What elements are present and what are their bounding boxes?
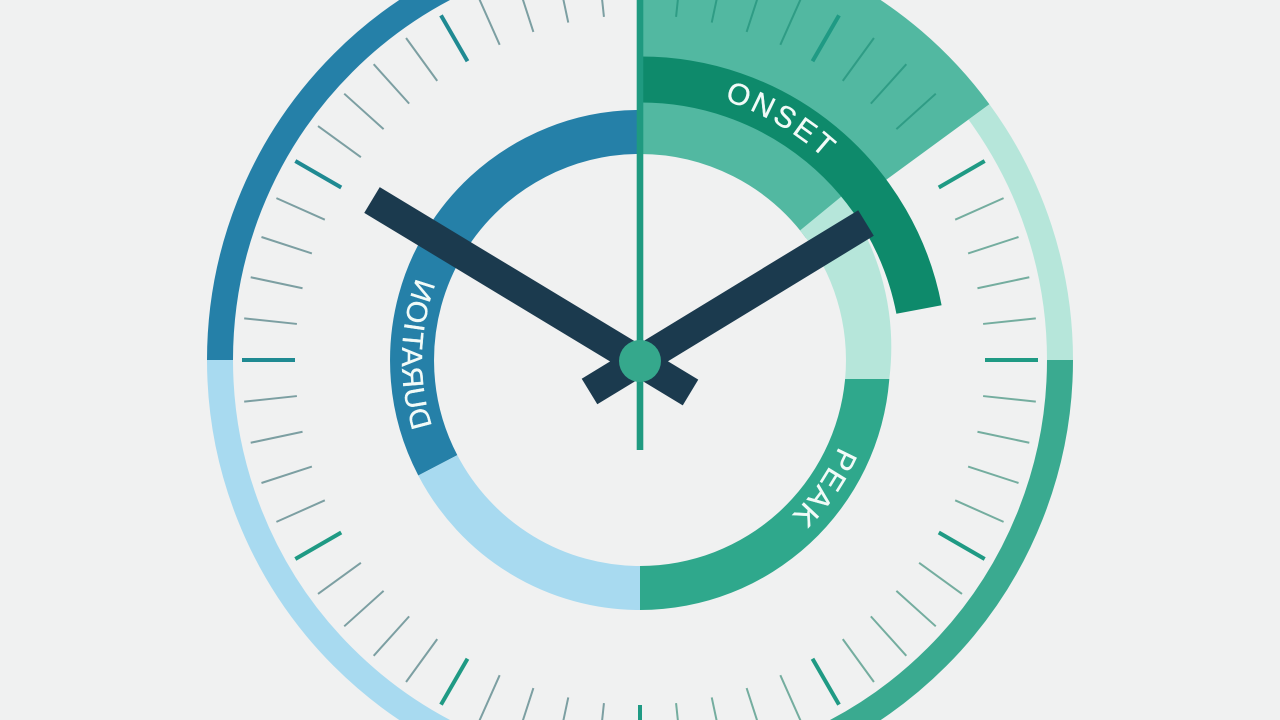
label: PEAK: PEAK [792,448,857,529]
outer ring: light blue segment [220,360,640,720]
outer ring: blue segment [220,0,640,360]
major ticks, green [295,15,1038,720]
outer ring [220,0,1060,720]
centre hub [619,340,661,382]
inner ring: mint segment [800,196,891,379]
onset wedge [640,40,898,171]
label: ONSET: ONSET [728,83,837,154]
vertical needle [637,0,643,450]
minor ticks on left side [244,0,604,720]
left hand [372,200,690,392]
inner ring: green segment [640,379,889,610]
inner ring: light blue segment [438,465,640,588]
tick marks [242,0,1038,720]
minor ticks in onset wedge [676,0,936,129]
inner ring: blue segment [412,132,640,465]
outer ring: mint segment [979,112,1060,360]
minor ticks on right side [676,198,1036,720]
inner ring [412,132,891,610]
label: DURATION: DURATION [402,280,435,430]
clock hands [372,200,866,392]
onset dark band [640,79,919,310]
outer ring: green segment [640,360,1060,720]
major ticks, teal [242,15,468,360]
right hand [590,223,866,392]
